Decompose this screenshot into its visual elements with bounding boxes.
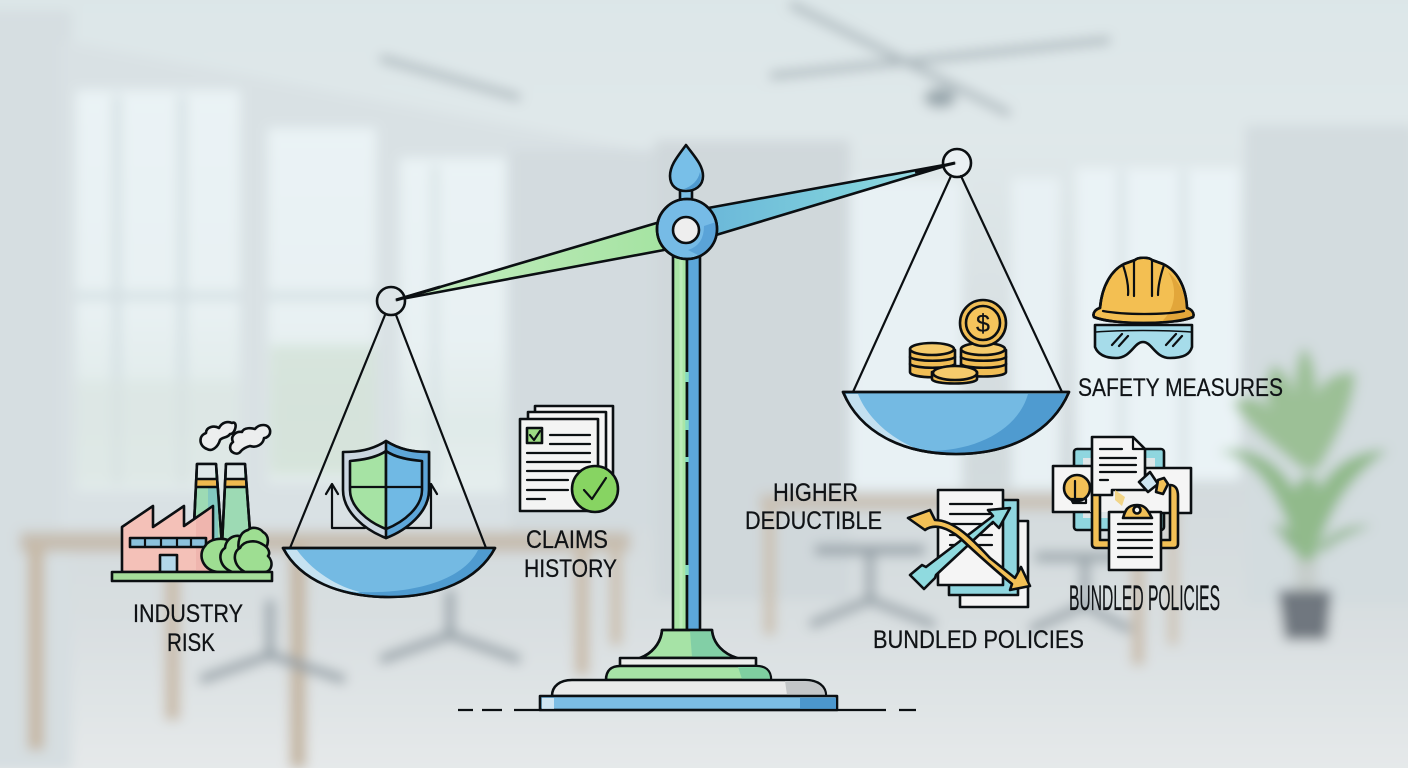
text: BUNDLED POLICIES [1069, 579, 1220, 618]
icon: shield with arrows [326, 441, 437, 538]
right pan strings [853, 176, 1062, 392]
pillar gaps [685, 372, 689, 575]
beam left arm [396, 222, 664, 300]
right pan [843, 392, 1069, 454]
label: bundled policies: BUNDLED POLICIES [873, 626, 1084, 654]
ground [112, 572, 272, 581]
teal arrow [910, 508, 1010, 589]
icon: bundled policies stack [1053, 437, 1191, 570]
smoke clouds [200, 422, 270, 454]
label: industry risk: INDUSTRY [133, 600, 243, 628]
label: safety measures: SAFETY MEASURES [1078, 374, 1283, 402]
right pivot ring [943, 149, 971, 177]
left pan [283, 548, 495, 597]
label: higher deductible: DEDUCTIBLE [745, 507, 882, 535]
label: claims history [524, 526, 617, 583]
decorative desks [20, 532, 630, 552]
balance scale [283, 145, 1069, 710]
gold arrow [908, 510, 1030, 590]
label: industry risk [133, 600, 243, 657]
icon: stacked coins: $ [976, 310, 990, 338]
chimneys [193, 464, 222, 545]
bushes [201, 528, 271, 572]
stand base [540, 630, 837, 710]
decorative plant [1218, 347, 1388, 640]
left pan strings [290, 315, 486, 548]
building [122, 506, 213, 572]
label: higher deductible [745, 479, 882, 535]
icon: factory [112, 422, 272, 581]
icon: stacked coins [910, 300, 1006, 384]
beam right arm [708, 163, 955, 235]
ground line [458, 709, 916, 711]
label: claims history: HISTORY [524, 555, 617, 583]
pivot finial [670, 145, 703, 204]
pivot hub [657, 199, 717, 259]
left pivot ring [377, 287, 405, 315]
icon: claims document [520, 406, 618, 512]
icon: hard hat and goggles [1093, 258, 1194, 358]
label: claims history: CLAIMS [526, 526, 608, 554]
icon: crossed arrows over policy pages [908, 490, 1030, 607]
stand pillar [673, 250, 700, 632]
label: higher deductible: HIGHER [773, 479, 858, 507]
label: industry risk: RISK [167, 629, 215, 657]
